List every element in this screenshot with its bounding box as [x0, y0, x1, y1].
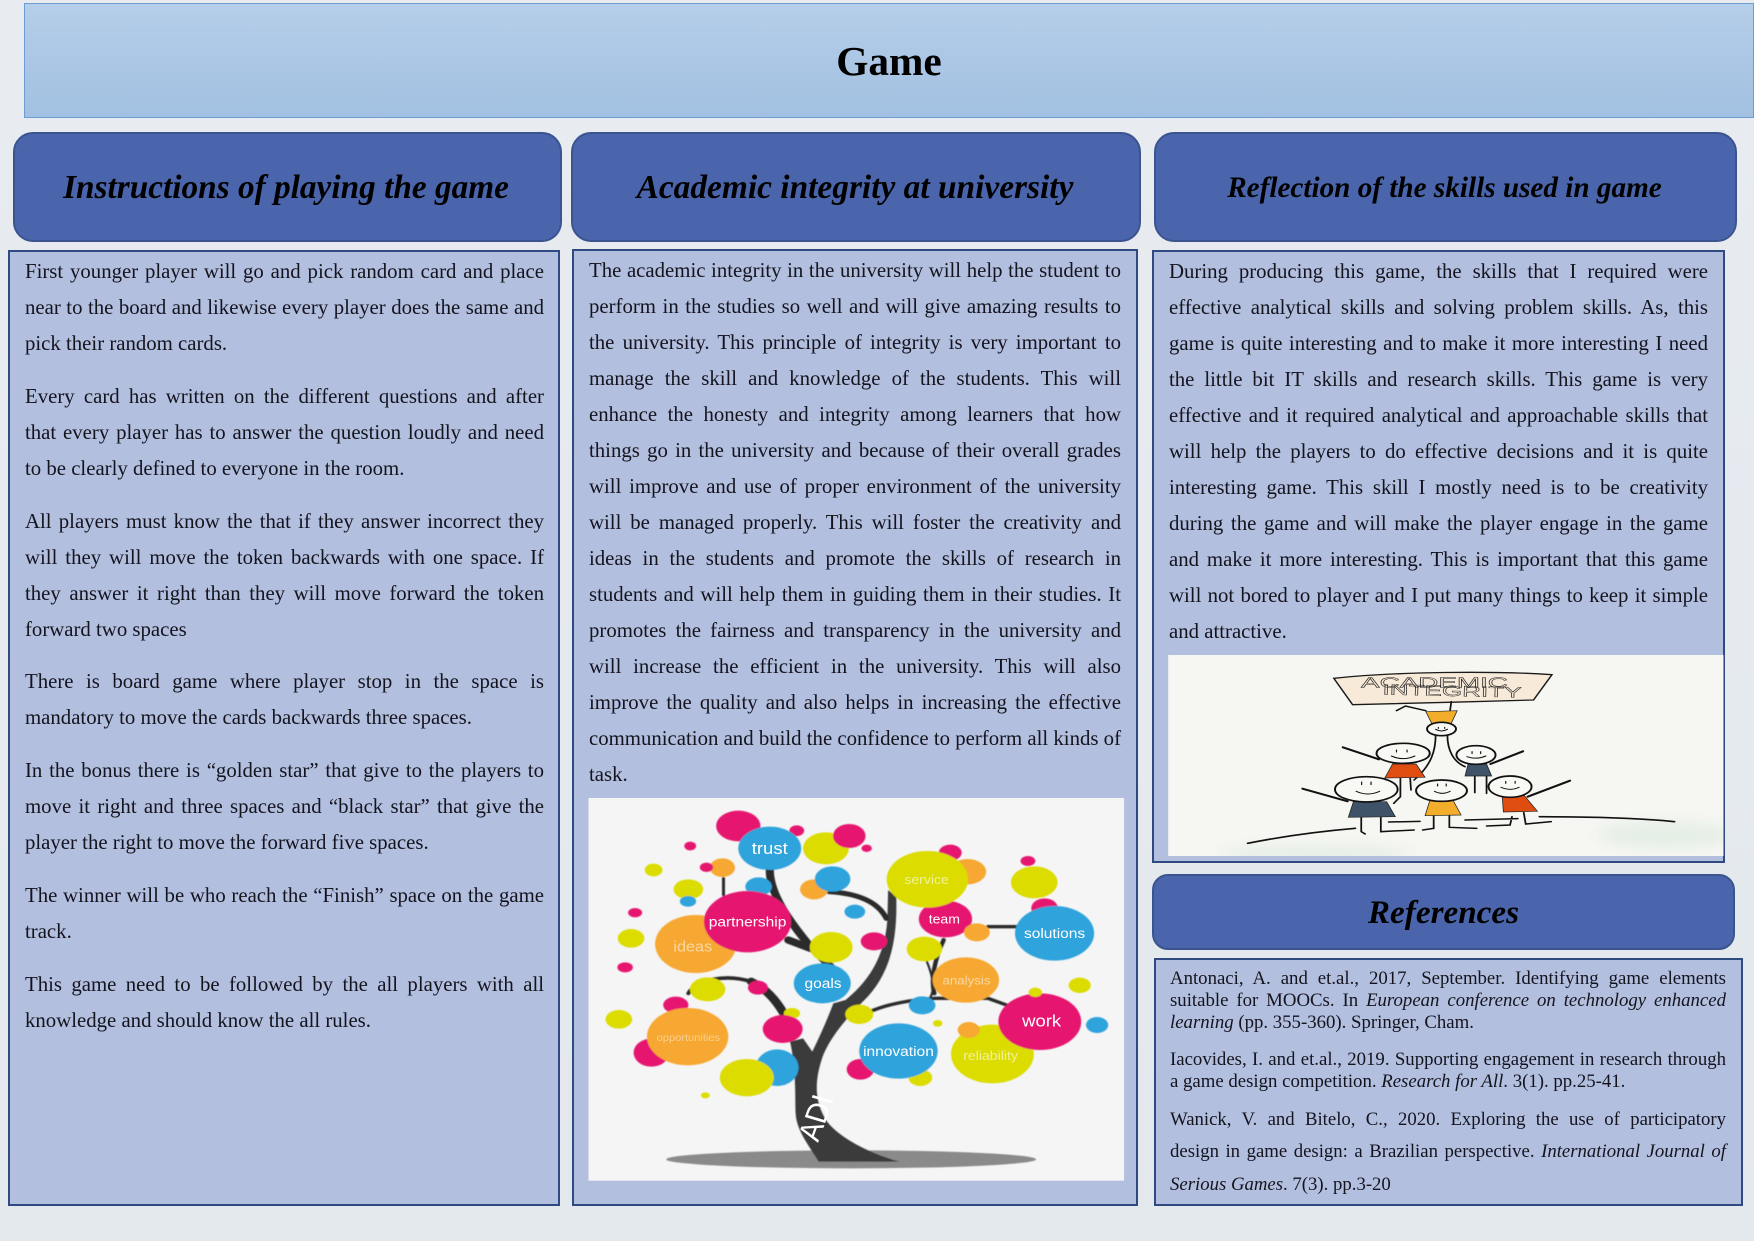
heading: academic integrity: Academic integrity at university — [637, 169, 1073, 206]
reference 3 — [1170, 1108, 1728, 1194]
reflection text: and attractive. — [1169, 620, 1287, 642]
image: integrity tree: innovation — [863, 1045, 934, 1060]
paragraph 6: track. — [25, 920, 72, 943]
reference 1: suitable for MOOCs. In European conference on technology enhanced — [1170, 990, 1726, 1011]
heading: references — [1152, 874, 1735, 950]
paragraph 3: they answer it right than they will move forward the token — [25, 582, 544, 605]
image: integrity tree: ideas — [673, 939, 713, 955]
reflection text: interesting game. This skill I mostly need is to be creativity — [1169, 476, 1708, 498]
paragraph 1: near to the board and likewise every player does the same and — [25, 296, 544, 319]
paragraph 2: to be clearly defined to everyone in the room. — [25, 457, 404, 480]
reference 1 — [1170, 968, 1726, 1033]
paragraph 3: will they will move the token backwards with one space. If — [25, 546, 544, 569]
paragraph 1: First younger player will go and pick random card and place — [25, 260, 544, 283]
paragraph 3 — [25, 510, 544, 641]
panel: reflection — [1152, 250, 1724, 863]
academic integrity text: will increase the efficient in the university. This will also — [589, 655, 1121, 678]
image: academic integrity human pyramid — [1168, 655, 1724, 856]
image: integrity tree: partnership — [709, 915, 786, 930]
academic integrity text: The academic integrity in the university will help the student to — [589, 259, 1121, 282]
panel: academic integrity — [572, 249, 1138, 1206]
heading: reflection — [1154, 132, 1737, 242]
image: academic integrity human pyramid: ACADEMIC — [1361, 676, 1508, 691]
paragraph 5: In the bonus there is “golden star” that give to the players to — [25, 759, 544, 782]
paragraph 3: All players must know the that if they answer incorrect they — [25, 510, 544, 533]
heading: reflection: Reflection of the skills used in game — [1227, 172, 1662, 204]
title banner — [24, 3, 1754, 118]
academic integrity text: students and will help them in guiding them in their studies. It — [589, 583, 1121, 606]
paragraph 2: that every player has to answer the question loudly and need — [25, 421, 544, 444]
image: integrity tree: opportunities — [657, 1032, 720, 1044]
heading: academic integrity — [571, 132, 1141, 242]
heading: references: References — [1368, 894, 1519, 931]
reflection text: game is quite interesting and to make it more interesting I need — [1169, 332, 1708, 354]
paragraph 5 — [25, 759, 544, 854]
academic integrity text: manage the skill and knowledge of the students. This will — [589, 367, 1121, 390]
references text — [1170, 968, 1728, 1194]
academic integrity text: will improve and use of proper environment of the university — [589, 475, 1121, 498]
academic integrity text: communication and build the confidence to perform all kinds of — [589, 727, 1121, 750]
reflection text — [1169, 260, 1708, 642]
instructions text — [25, 260, 544, 1032]
paragraph 6: The winner will be who reach the “Finish” space on the game — [25, 884, 544, 907]
paragraph 2: Every card has written on the different questions and after — [25, 385, 544, 408]
panel: references — [1154, 958, 1743, 1206]
reflection text: During producing this game, the skills that I required were — [1169, 260, 1708, 282]
reference 1: learning (pp. 355-360). Springer, Cham. — [1170, 1012, 1474, 1033]
paragraph 5: player the right to move the forward five spaces. — [25, 831, 429, 854]
image: integrity tree: trust — [752, 839, 788, 858]
paragraph 5: move it right and three spaces and “black star” that give the — [25, 795, 544, 818]
reflection text: effective analytical skills and solving problem skills. As, this — [1169, 296, 1708, 318]
academic integrity text: improve the quality and also helps in increasing the effective — [589, 691, 1121, 714]
paragraph 4 — [25, 670, 544, 729]
paragraph 3: forward two spaces — [25, 618, 187, 641]
academic integrity text: the university. This principle of integrity is very important to — [589, 331, 1121, 354]
paragraph 7: knowledge and should know the all rules. — [25, 1008, 371, 1032]
image: integrity tree: work — [1021, 1012, 1061, 1030]
image: integrity tree: reliability — [963, 1049, 1018, 1063]
panel: instructions — [8, 250, 560, 1206]
academic integrity text — [589, 259, 1122, 786]
academic integrity text: promotes the fairness and transparency in the university and — [589, 619, 1121, 642]
reflection text: the little bit IT skills and research skills. This game is very — [1169, 368, 1708, 390]
paragraph 4: There is board game where player stop in the space is — [25, 670, 544, 693]
image: integrity tree: team — [929, 912, 960, 926]
title banner: Game — [836, 38, 942, 84]
image: integrity tree: analysis — [943, 974, 991, 988]
paragraph 1 — [25, 260, 544, 355]
paragraph 2 — [25, 385, 544, 480]
image: integrity tree: ADI — [792, 1091, 841, 1145]
academic integrity text: ideas in the students and promote the skills of research in — [589, 547, 1121, 570]
academic integrity text: perform in the studies so well and will give amazing results to — [589, 295, 1121, 318]
reflection text: will not bored to player and I put many things to keep it simple — [1169, 584, 1708, 606]
paragraph 4: mandatory to move the cards backwards three spaces. — [25, 706, 472, 729]
paragraph 1: pick their random cards. — [25, 332, 227, 355]
image: integrity tree: solutions — [1024, 927, 1085, 942]
reflection text: and make it more interesting. This is important that this game — [1169, 548, 1708, 570]
academic integrity text: enhance the honesty and integrity among learners that how — [589, 403, 1121, 426]
heading: instructions — [13, 132, 562, 242]
reference 3: Serious Games. 7(3). pp.3-20 — [1170, 1174, 1391, 1194]
paragraph 7: This game need to be followed by the all players with all — [25, 972, 544, 996]
heading: instructions: Instructions of playing the game — [63, 169, 509, 206]
reflection text: effective and it required analytical and approachable skills that — [1169, 404, 1708, 426]
paragraph 6 — [25, 884, 544, 943]
reflection text: during the game and will make the player engage in the game — [1169, 512, 1708, 534]
reference 3: Wanick, V. and Bitelo, C., 2020. Exploring the use of participatory — [1170, 1108, 1726, 1130]
image: integrity tree: service — [904, 873, 949, 887]
reference 1: Antonaci, A. and et.al., 2017, September. Identifying game elements — [1170, 968, 1726, 989]
image: academic integrity human pyramid: INTEGRITY — [1382, 683, 1522, 701]
reference 2: a game design competition. Research for All. 3(1). pp.25-41. — [1170, 1071, 1625, 1092]
reference 2 — [1170, 1049, 1726, 1092]
reference 2: Iacovides, I. and et.al., 2019. Supporting engagement in research through — [1170, 1049, 1726, 1070]
academic integrity text: things go in the university and because of their overall grades — [589, 439, 1121, 462]
reference 3: design in game design: a Brazilian perspective. International Journal of — [1170, 1141, 1726, 1162]
reflection text: will help the players to do effective decisions and it is quite — [1169, 440, 1708, 462]
academic integrity text: will be managed properly. This will foster the creativity and — [589, 511, 1121, 534]
image: integrity tree — [588, 798, 1124, 1181]
paragraph 7 — [25, 972, 544, 1032]
image: integrity tree: goals — [804, 977, 842, 992]
academic integrity text: task. — [589, 763, 628, 786]
